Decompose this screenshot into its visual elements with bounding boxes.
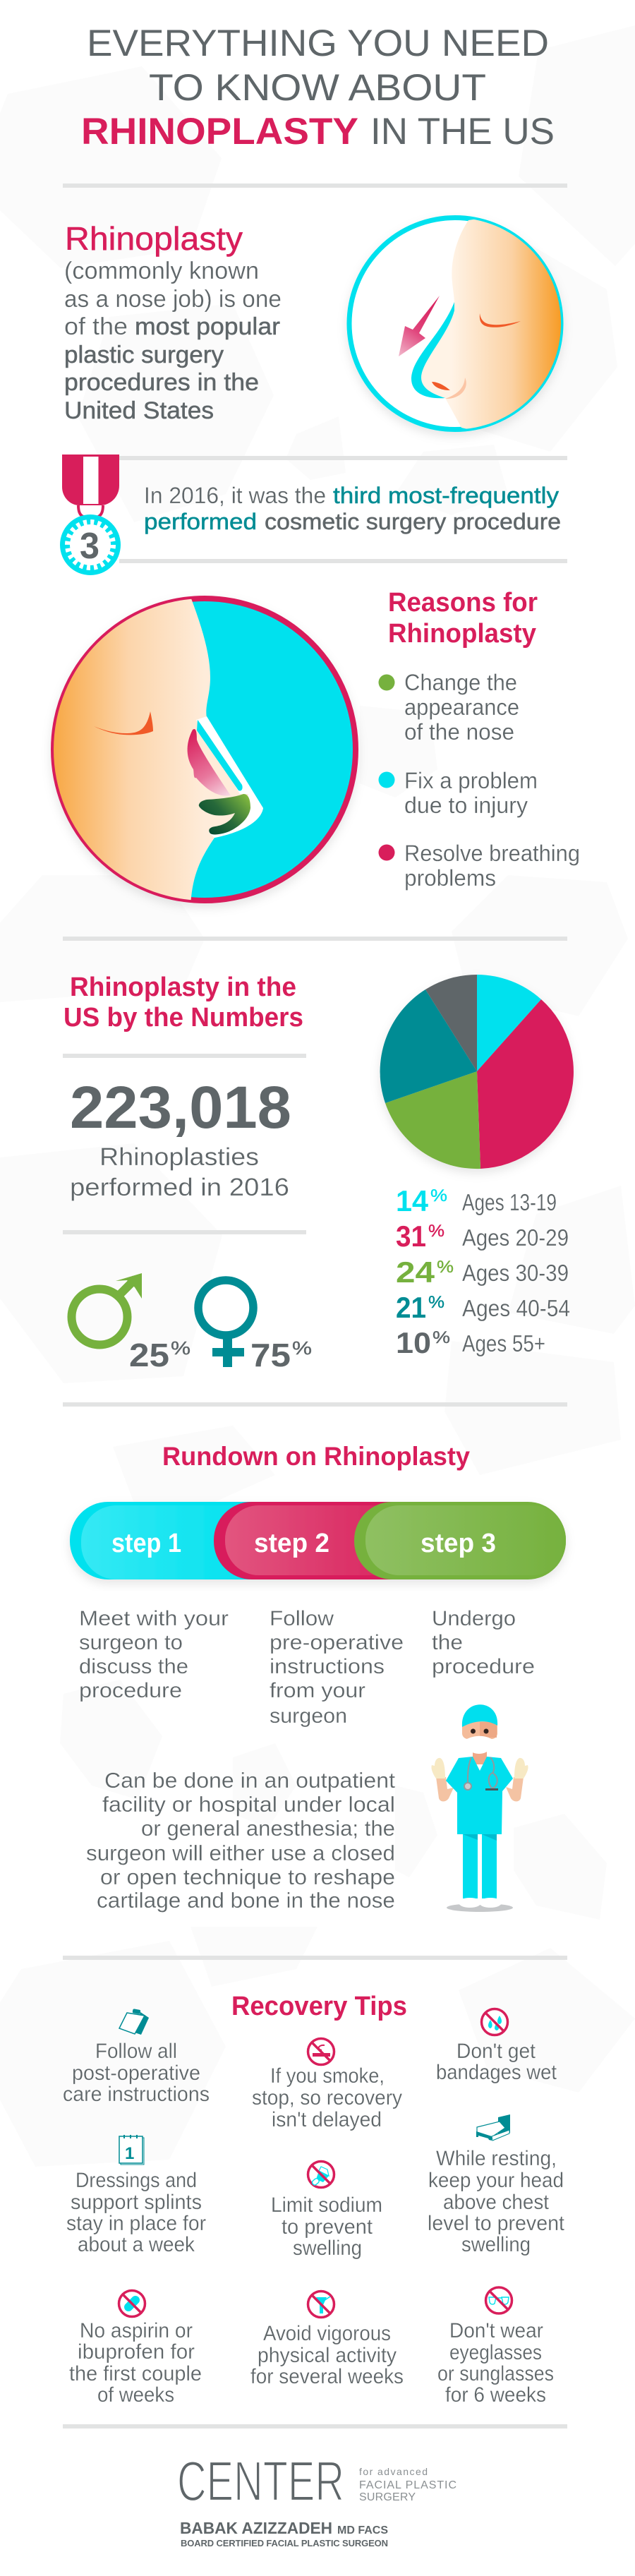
tip: stop smoking xyxy=(252,2038,402,2131)
ages 30-39: % xyxy=(437,1258,454,1277)
icon: no exercise xyxy=(308,2291,334,2318)
title: EVERYTHING YOU NEED xyxy=(87,23,549,64)
tip: no aspirin: of weeks xyxy=(97,2383,174,2407)
illustration: surgeon xyxy=(431,1704,528,1912)
tip: dressings: about a week xyxy=(78,2233,195,2256)
step 2 xyxy=(214,1502,447,1579)
ages 30-39: 24 xyxy=(396,1256,435,1289)
intro text block: procedures in the xyxy=(64,369,259,396)
icon: no bandage xyxy=(119,2291,145,2316)
reason: injury xyxy=(378,768,538,818)
tip: no aspirin: the first couple xyxy=(69,2362,202,2385)
intro text block: plastic surgery xyxy=(64,342,224,368)
statistic: total procedures: Rhinoplasties xyxy=(99,1143,259,1171)
tip: bandages dry: Don't get xyxy=(456,2040,536,2063)
step 1 description: discuss the xyxy=(79,1655,188,1678)
reason: change appearance xyxy=(378,670,519,745)
steps bar xyxy=(70,1502,566,1579)
trousers xyxy=(463,1834,478,1898)
icon: no smoking xyxy=(308,2038,334,2065)
reason: change appearance: appearance xyxy=(404,694,519,720)
septum xyxy=(199,794,250,834)
logo: MD FACS xyxy=(337,2524,388,2536)
tip: keep head raised: above chest xyxy=(443,2191,550,2214)
intro text block: United States xyxy=(64,397,214,424)
tip: keep head raised xyxy=(428,2114,565,2256)
ages 13-19: 14 xyxy=(396,1184,429,1217)
title: RHINOPLASTY xyxy=(81,111,358,152)
ages 55+: % xyxy=(433,1328,450,1347)
procedure paragraph: surgeon will either use a closed xyxy=(86,1841,395,1865)
tip: dressings: Dressings and xyxy=(75,2169,197,2192)
ranking statement: third most-frequently xyxy=(333,483,559,508)
pie chart: age groups xyxy=(380,975,574,1169)
heading xyxy=(388,588,538,649)
arms xyxy=(436,1777,454,1801)
tip: no aspirin xyxy=(69,2291,202,2407)
title: TO KNOW ABOUT xyxy=(149,67,486,109)
ages 13-19 xyxy=(396,1184,557,1217)
tip: keep head raised: level to prevent xyxy=(428,2212,565,2235)
reason: change appearance: Change the xyxy=(404,670,517,695)
ages 40-54: 21 xyxy=(396,1291,426,1324)
step 3 description: procedure xyxy=(432,1655,535,1678)
tip: avoid activity xyxy=(250,2291,404,2388)
intro text block: (commonly known xyxy=(64,258,259,284)
ages 40-54: Ages 40-54 xyxy=(462,1295,570,1321)
icon: calendar xyxy=(119,2135,144,2165)
tip: stop smoking: stop, so recovery xyxy=(252,2086,402,2109)
ages 20-29 xyxy=(396,1220,569,1253)
procedure paragraph: or general anesthesia; the xyxy=(141,1816,395,1841)
tip: avoid activity: physical activity xyxy=(258,2344,397,2367)
ages 30-39 xyxy=(396,1256,569,1289)
procedure paragraph: or open technique to reshape xyxy=(100,1865,395,1889)
ranking statement: In 2016, it was the xyxy=(144,483,326,508)
statistic: total procedures xyxy=(70,1074,291,1201)
statistic: total procedures: 223,018 xyxy=(70,1074,291,1140)
title xyxy=(81,23,555,152)
nasal bone xyxy=(197,720,243,791)
logo: FACIAL PLASTIC xyxy=(359,2479,456,2491)
step 2: step 2 xyxy=(254,1529,329,1558)
tip: keep head raised: While resting, xyxy=(436,2147,557,2170)
step 1: step 1 xyxy=(111,1529,181,1558)
neck xyxy=(473,1750,487,1764)
face xyxy=(42,593,263,907)
tip: limit sodium: to prevent xyxy=(282,2215,373,2239)
logo: BABAK AZIZZADEH xyxy=(180,2519,332,2537)
tip: keep head raised: swelling xyxy=(461,2233,531,2256)
tip: limit sodium: Limit sodium xyxy=(271,2193,382,2217)
panel: reasons for rhinoplasty xyxy=(378,588,580,891)
scrubs xyxy=(446,1757,513,1834)
heading: Rhinoplasty xyxy=(388,619,536,649)
tip: bandages dry: bandages wet xyxy=(436,2061,557,2084)
tip: no aspirin: No aspirin or xyxy=(80,2319,193,2342)
tip: no glasses: eyeglasses xyxy=(449,2341,542,2364)
ranking statement: performed xyxy=(144,509,257,534)
step 3: step 3 xyxy=(421,1529,496,1558)
reason: breathing: Resolve breathing xyxy=(404,841,580,866)
intro text block: as a nose job) is one xyxy=(64,286,282,313)
tip: dressings: stay in place for xyxy=(66,2212,206,2235)
icon: no salt xyxy=(308,2161,334,2188)
intro text block: of the xyxy=(64,313,128,340)
reason: breathing xyxy=(378,841,580,891)
illustration: nose profile circle xyxy=(344,215,566,438)
reason: change appearance: of the nose xyxy=(404,719,514,745)
ages 20-29: % xyxy=(428,1222,445,1241)
surgical cap xyxy=(462,1704,497,1727)
ages 55+: 10 xyxy=(396,1326,431,1359)
step 1 description: procedure xyxy=(79,1679,182,1702)
tip: no glasses: or sunglasses xyxy=(437,2362,554,2385)
procedure paragraph: cartilage and bone in the nose xyxy=(97,1888,395,1913)
ages 40-54 xyxy=(396,1291,570,1324)
head xyxy=(462,1721,497,1739)
icon: third place medal: 3 xyxy=(80,526,99,567)
step 2 description: surgeon xyxy=(270,1704,347,1728)
title: IN THE US xyxy=(370,111,555,152)
tip: no glasses xyxy=(437,2287,554,2407)
step 2 description xyxy=(270,1607,404,1728)
ages 20-29: 31 xyxy=(396,1220,426,1253)
ranking statement xyxy=(144,483,561,534)
tip: follow instructions xyxy=(63,2009,210,2106)
heading: Reasons for xyxy=(388,588,538,618)
tip: stop smoking: If you smoke, xyxy=(270,2064,385,2088)
ages 20-29: Ages 20-29 xyxy=(462,1224,569,1251)
step 2 description: Follow xyxy=(270,1607,334,1630)
step 2 description: pre-operative xyxy=(270,1631,404,1654)
step 3 description xyxy=(432,1607,535,1678)
tip: no aspirin: ibuprofen for xyxy=(78,2340,195,2364)
tip: follow instructions: Follow all xyxy=(95,2040,177,2063)
statistic: male share: % xyxy=(171,1337,190,1359)
tip: dressings xyxy=(66,2135,206,2256)
ages 13-19: % xyxy=(430,1186,447,1205)
step 2 description: instructions xyxy=(270,1655,385,1678)
illustration: nose cross-section circle xyxy=(42,593,356,907)
icon: no water xyxy=(481,2009,508,2035)
heading: by the numbers xyxy=(64,973,303,1033)
tip: stop smoking: isn't delayed xyxy=(272,2108,382,2131)
tip: avoid activity: for several weeks xyxy=(250,2365,404,2388)
reason: breathing: problems xyxy=(404,865,496,891)
intro text block xyxy=(64,220,282,424)
icon: clipboard xyxy=(119,2009,149,2035)
statistic: female share: 75 xyxy=(250,1337,291,1373)
intro text block: most popular xyxy=(135,313,280,340)
logo: SURGERY xyxy=(359,2491,416,2503)
ages 55+ xyxy=(396,1326,545,1359)
heading: by the numbers: US by the Numbers xyxy=(64,1003,303,1033)
cartilage xyxy=(188,729,231,796)
step 1 description xyxy=(79,1607,229,1702)
legend: age groups xyxy=(396,1184,570,1359)
eye xyxy=(94,711,153,735)
statistic: female share: % xyxy=(292,1337,312,1359)
heading: rundown: Rundown on Rhinoplasty xyxy=(162,1442,470,1471)
statistic: total procedures: performed in 2016 xyxy=(70,1174,289,1201)
step 1 xyxy=(70,1502,303,1579)
nose wing xyxy=(445,378,466,399)
nose outline xyxy=(411,302,454,398)
gloves xyxy=(431,1758,445,1778)
ages 13-19: Ages 13-19 xyxy=(462,1189,557,1215)
nostril xyxy=(432,382,450,390)
statistic: male share xyxy=(72,1273,190,1373)
surgical mask xyxy=(466,1736,492,1754)
logo: CENTER xyxy=(177,2450,344,2512)
tip: limit sodium: swelling xyxy=(293,2237,362,2260)
ranking statement: cosmetic surgery procedure xyxy=(265,509,561,534)
step 3 description: the xyxy=(432,1631,463,1654)
tip: limit sodium xyxy=(271,2161,382,2260)
face xyxy=(421,219,561,429)
procedure paragraph: facility or hospital under local xyxy=(102,1792,395,1817)
tip: dressings: support splints xyxy=(71,2191,202,2214)
step 3 xyxy=(354,1502,566,1579)
step 3 description: Undergo xyxy=(432,1607,516,1630)
step 1 description: Meet with your xyxy=(79,1607,229,1630)
icon: bed xyxy=(476,2114,510,2141)
statistic: male share: 25 xyxy=(129,1337,169,1373)
arrow xyxy=(399,296,440,356)
procedure paragraph xyxy=(86,1768,395,1913)
logo: for advanced xyxy=(359,2466,428,2477)
intro text block: Rhinoplasty xyxy=(65,220,243,257)
stethoscope xyxy=(468,1757,497,1788)
procedure paragraph: Can be done in an outpatient xyxy=(104,1768,395,1793)
heading: by the numbers: Rhinoplasty in the xyxy=(70,973,296,1002)
icon: third place medal xyxy=(60,455,121,575)
tip: follow instructions: care instructions xyxy=(63,2083,210,2106)
ages 55+: Ages 55+ xyxy=(462,1330,545,1356)
logo: BOARD CERTIFIED FACIAL PLASTIC SURGEON xyxy=(181,2538,388,2548)
step 1 description: surgeon to xyxy=(79,1631,183,1654)
white nose outline xyxy=(196,716,263,838)
tip: no glasses: for 6 weeks xyxy=(445,2383,546,2407)
ages 40-54: % xyxy=(428,1293,445,1312)
step 2 description: from your xyxy=(270,1679,365,1702)
icon: no glasses xyxy=(485,2287,512,2313)
icon: calendar: 1 xyxy=(125,2144,134,2163)
tip: avoid activity: Avoid vigorous xyxy=(263,2322,391,2345)
heading: recovery tips: Recovery Tips xyxy=(231,1992,407,2021)
reason: injury: Fix a problem xyxy=(404,768,538,793)
ages 30-39: Ages 30-39 xyxy=(462,1260,569,1286)
eye xyxy=(480,313,521,327)
reason: injury: due to injury xyxy=(404,793,528,818)
tip: follow instructions: post-operative xyxy=(72,2062,200,2085)
statistic: female share xyxy=(198,1280,312,1373)
shoes xyxy=(459,1898,481,1908)
tip: keep head raised: keep your head xyxy=(428,2169,564,2192)
tip: no glasses: Don't wear xyxy=(449,2319,543,2342)
tip: bandages dry xyxy=(436,2009,557,2084)
logo xyxy=(177,2450,456,2548)
